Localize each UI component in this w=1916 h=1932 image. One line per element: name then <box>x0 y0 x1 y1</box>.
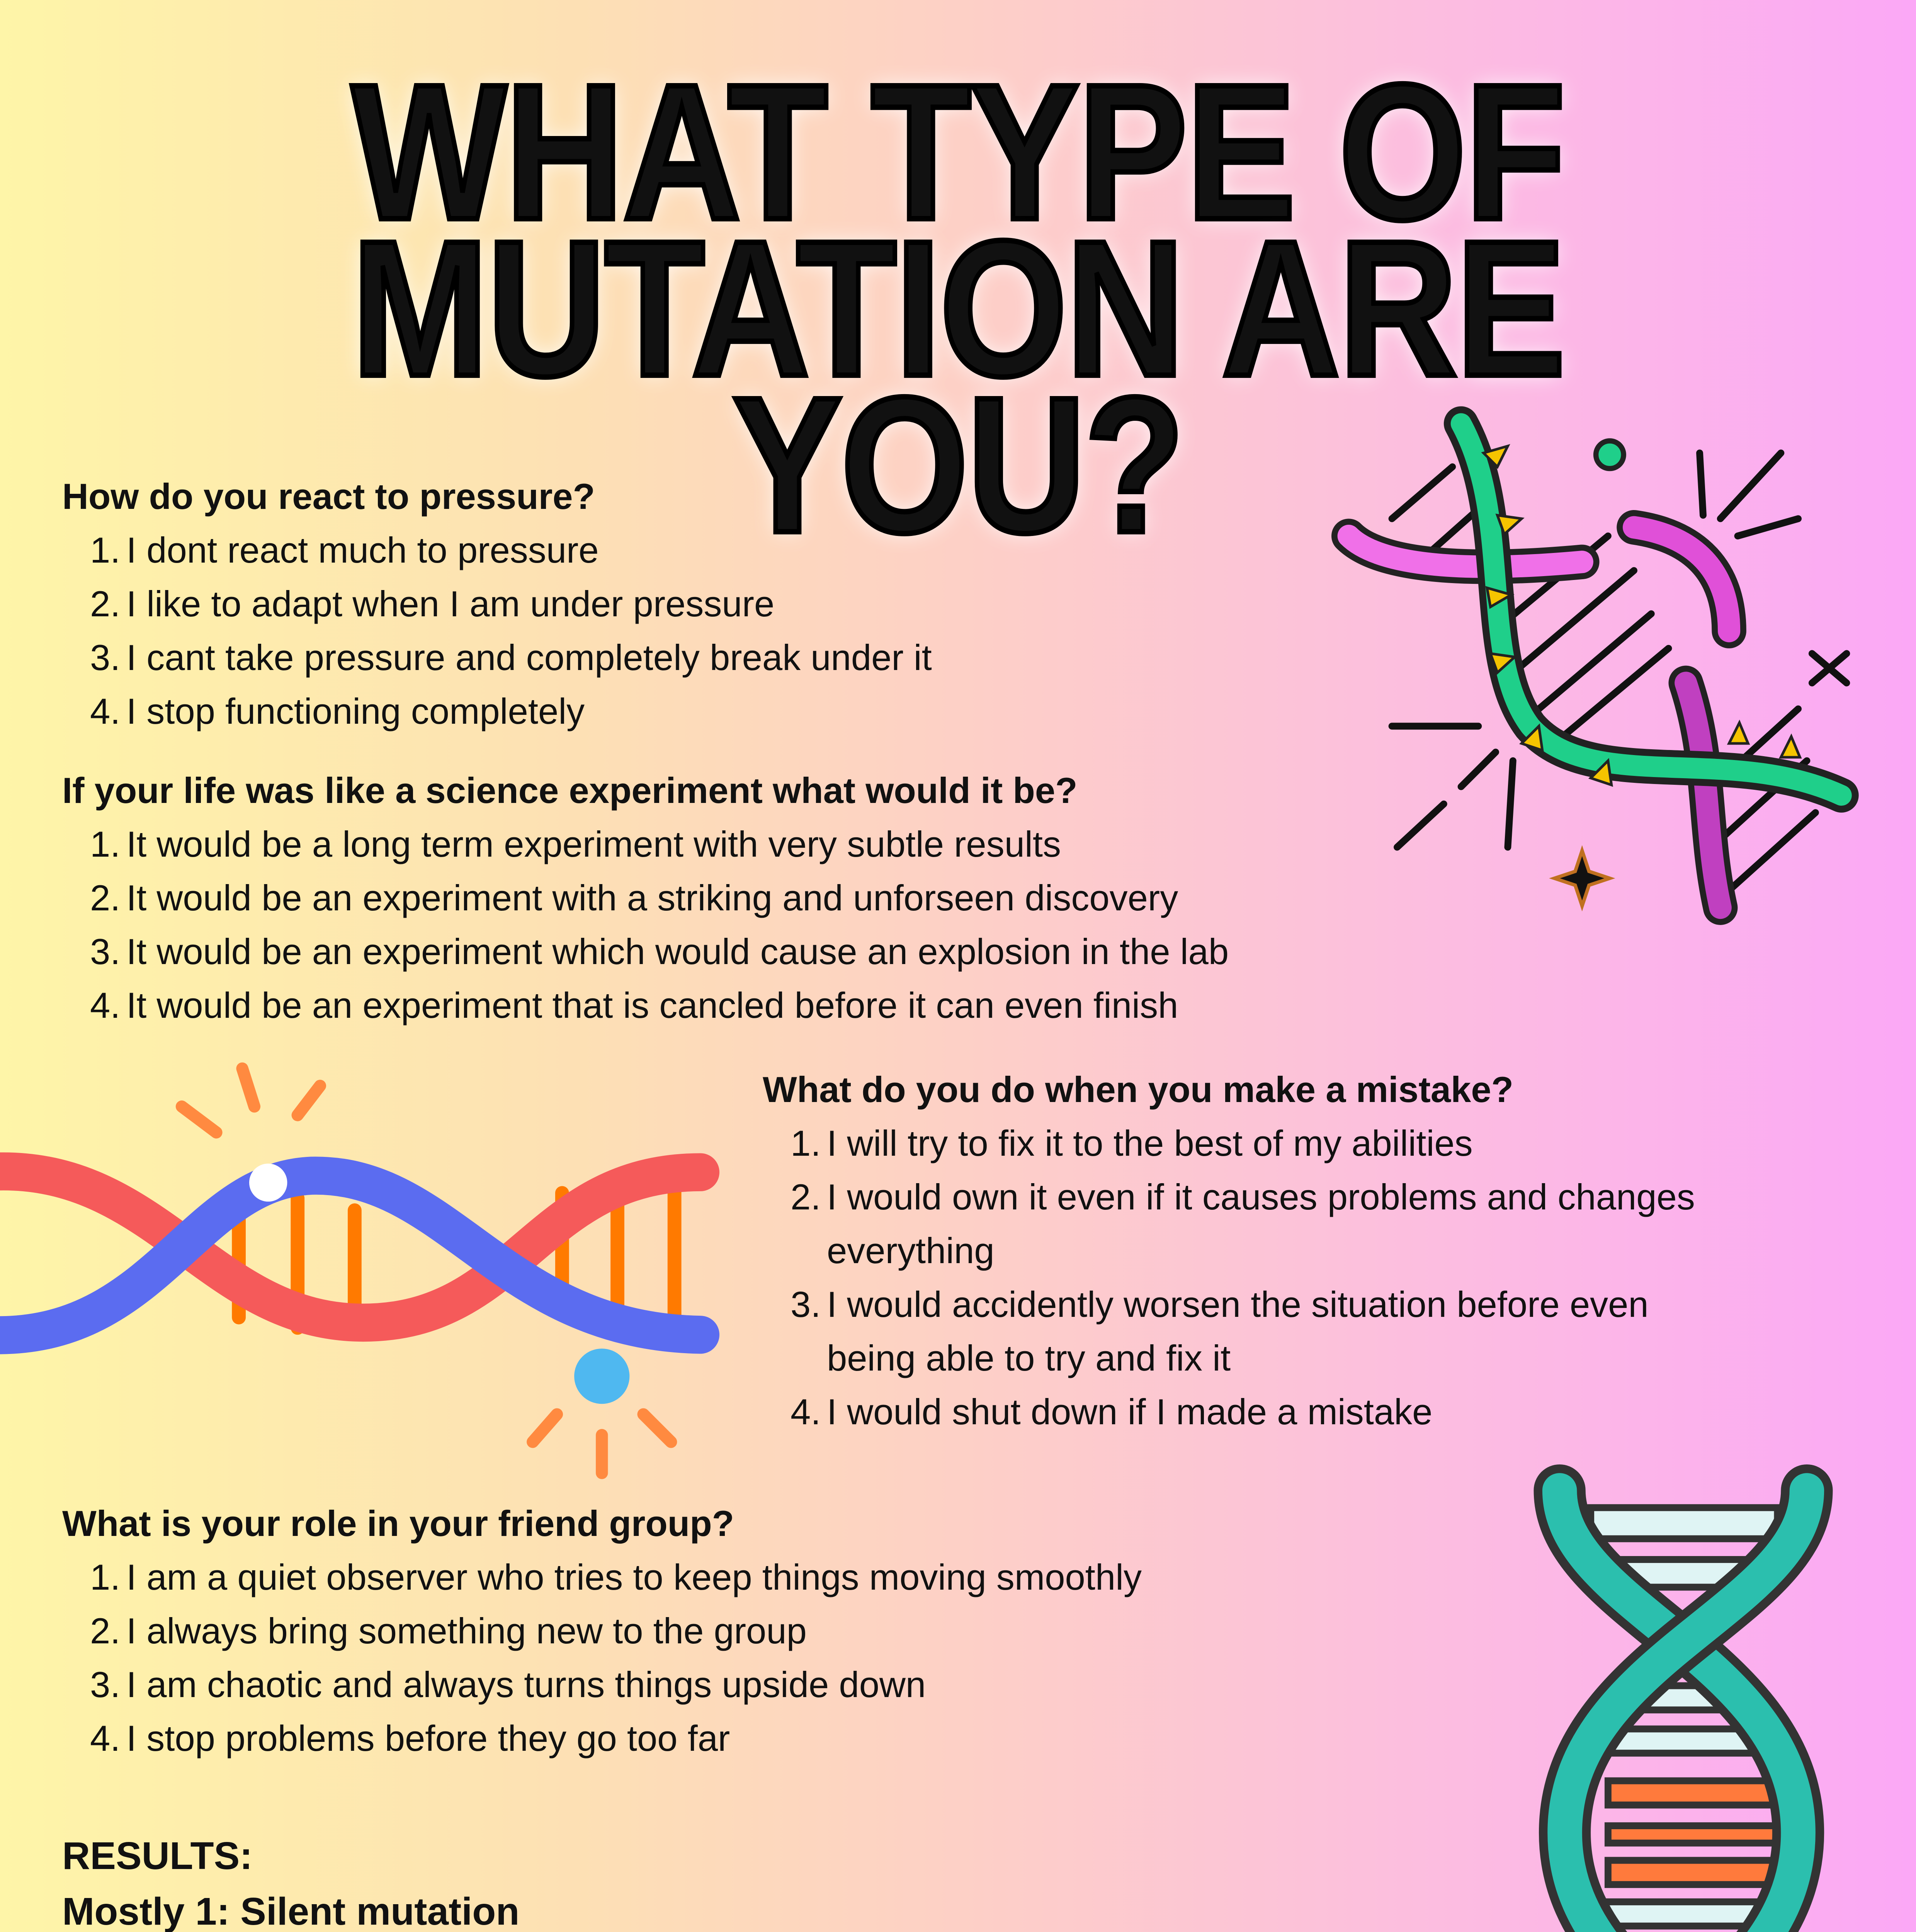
question 3: I would accidently worsen the situation before even <box>827 1284 1649 1325</box>
question 2: If your life was like a science experiment what would it be? <box>62 770 1078 811</box>
question 1: 4. <box>90 691 120 731</box>
question 3: 4. <box>791 1391 821 1432</box>
question 3: being able to try and fix it <box>827 1338 1231 1378</box>
question 4: I always bring something new to the group <box>126 1611 807 1651</box>
question 4: I stop problems before they go too far <box>126 1718 730 1759</box>
question 3: I would own it even if it causes problems and changes <box>827 1177 1695 1217</box>
question 1: I like to adapt when I am under pressure <box>126 583 774 624</box>
question 4: I am chaotic and always turns things upside down <box>126 1664 926 1705</box>
question 2: It would be an experiment which would cause an explosion in the lab <box>126 931 1229 972</box>
question 1: 1. <box>90 530 120 570</box>
question 4: 2. <box>90 1611 120 1651</box>
question 4: What is your role in your friend group? <box>62 1503 734 1544</box>
question 2: 1. <box>90 824 120 864</box>
question 1: I cant take pressure and completely break under it <box>126 637 932 678</box>
results: Mostly 1: Silent mutation <box>62 1890 519 1932</box>
question 2 <box>62 764 1229 1032</box>
question 2: It would be an experiment with a striking and unforseen discovery <box>126 878 1178 918</box>
question 2: 2. <box>90 878 120 918</box>
question 2: 4. <box>90 985 120 1026</box>
question 3: I would shut down if I made a mistake <box>827 1391 1432 1432</box>
question 1: 3. <box>90 637 120 678</box>
question 1: How do you react to pressure? <box>62 476 595 517</box>
title <box>0 73 1916 543</box>
question 2: 3. <box>90 931 120 972</box>
question 3: everything <box>827 1230 995 1271</box>
question 4 <box>62 1497 1142 1765</box>
question 3: What do you do when you make a mistake? <box>763 1069 1513 1110</box>
results <box>62 1828 1664 1932</box>
question 1: I dont react much to pressure <box>126 530 599 570</box>
question 3 <box>763 1063 1695 1439</box>
question 3: I will try to fix it to the best of my abilities <box>827 1123 1473 1163</box>
title: WHAT TYPE OF <box>352 44 1564 260</box>
question 1 <box>62 469 932 738</box>
question 3: 1. <box>791 1123 821 1163</box>
question 3: 2. <box>791 1177 821 1217</box>
icon: teal DNA right <box>1560 1490 1807 1932</box>
question 1: 2. <box>90 583 120 624</box>
question 4: 3. <box>90 1664 120 1705</box>
question 1: I stop functioning completely <box>126 691 585 731</box>
results: RESULTS: <box>62 1834 253 1878</box>
question 2: It would be an experiment that is cancled before it can even finish <box>126 985 1178 1026</box>
question 3: 3. <box>791 1284 821 1325</box>
question 4: 4. <box>90 1718 120 1759</box>
icon: red and blue DNA middle left <box>0 1068 700 1473</box>
icon: spiky DNA top right <box>1349 423 1846 908</box>
title: MUTATION ARE YOU? <box>352 200 1564 573</box>
question 2: It would be a long term experiment with very subtle results <box>126 824 1061 864</box>
question 4: I am a quiet observer who tries to keep things moving smoothly <box>126 1557 1142 1597</box>
question 4: 1. <box>90 1557 120 1597</box>
